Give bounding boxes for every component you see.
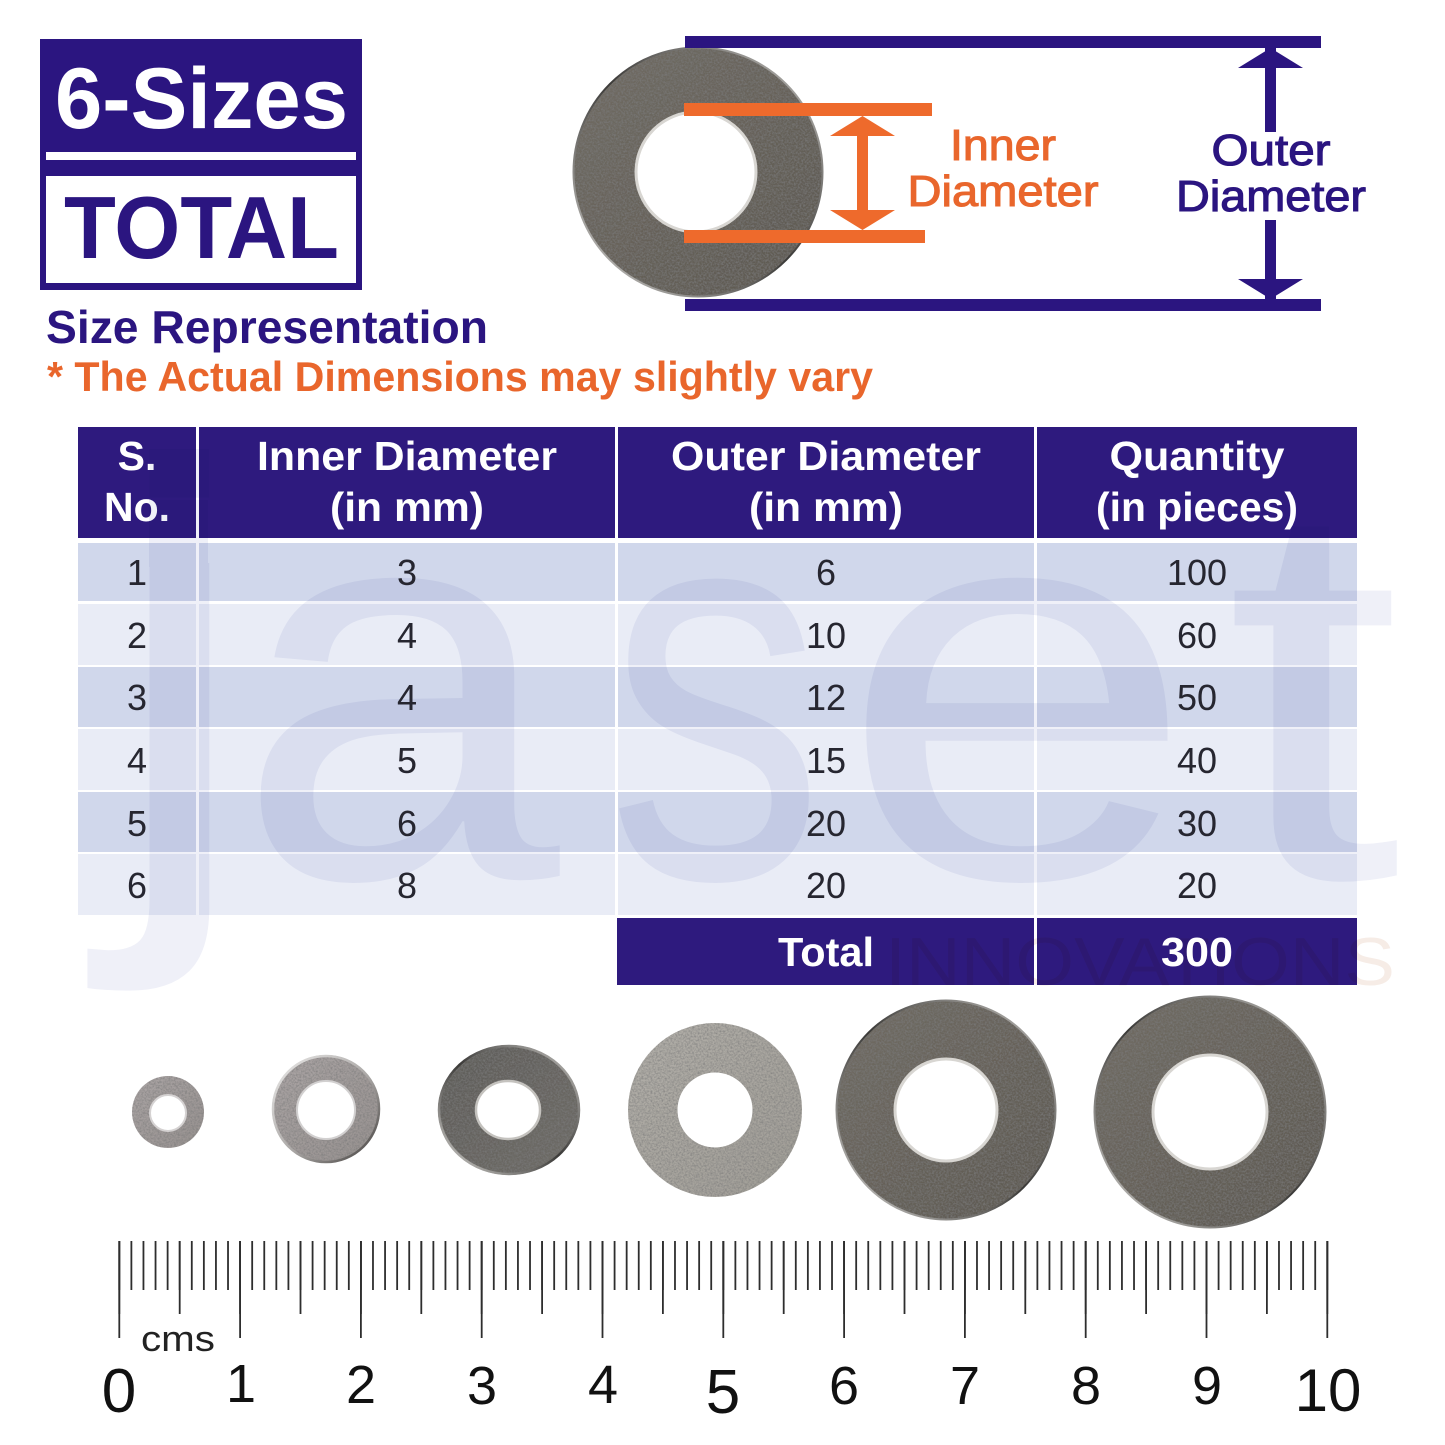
table data rows: 4	[397, 615, 417, 656]
outer diameter bars	[685, 36, 1321, 311]
ruler numbers: 7	[950, 1356, 980, 1416]
table data rows: 10	[806, 615, 846, 656]
table data rows	[127, 552, 1227, 906]
note: actual dimensions disclaimer: * The Actual Dimensions may slightly vary	[47, 353, 874, 400]
watermark: Jaset Innovations: INNOVATIONS	[885, 924, 1395, 1000]
label: Inner Diameter: Inner	[950, 121, 1056, 170]
table data rows: 20	[806, 803, 846, 844]
label: Inner Diameter: Diameter	[908, 167, 1098, 216]
icon: large washer photo	[573, 47, 823, 297]
washer 5	[836, 1000, 1056, 1220]
table header row	[78, 427, 1357, 538]
total row background	[617, 918, 1357, 985]
table: washer sizes	[78, 345, 1404, 1000]
table header row: Inner Diameter	[257, 433, 557, 479]
ruler numbers: 10	[1295, 1357, 1361, 1424]
table data rows: 15	[806, 740, 846, 781]
table header row: (in mm)	[330, 484, 484, 530]
table data rows: 60	[1177, 615, 1217, 656]
total row: 300	[1161, 929, 1233, 975]
ruler: centimetre scale	[102, 1266, 1361, 1427]
table data rows: 5	[397, 740, 417, 781]
ruler ticks	[118, 1266, 1329, 1290]
washers: six sizes	[132, 996, 1326, 1228]
ruler numbers: 3	[467, 1356, 497, 1416]
watermark: Jaset Innovations: t	[1225, 387, 1404, 993]
table data rows: 3	[127, 677, 147, 718]
washer 3	[438, 1045, 580, 1175]
heading: Size Representation: Size Representation	[46, 301, 488, 353]
ruler numbers: 2	[346, 1355, 376, 1415]
total row	[778, 929, 1233, 975]
watermark: Jaset Innovations: e	[839, 374, 1196, 996]
table data rows: 3	[397, 552, 417, 593]
table data rows: 6	[127, 865, 147, 906]
table header row: No.	[104, 484, 170, 530]
ruler unit label: cms	[141, 1318, 215, 1359]
table header row: (in pieces)	[1096, 484, 1298, 530]
badge label: TOTAL: TOTAL	[64, 178, 339, 277]
table data rows: 20	[1177, 865, 1217, 906]
diagram: inner and outer diameter	[573, 36, 1366, 311]
ruler numbers	[102, 1354, 1361, 1427]
label: Outer Diameter: Diameter	[1176, 172, 1366, 221]
inner diameter bars	[684, 103, 932, 243]
watermark: Jaset Innovations: j	[83, 345, 255, 997]
table data rows: 2	[127, 615, 147, 656]
badge heading: 6-Sizes: 6-Sizes	[55, 51, 348, 147]
ruler numbers: 0	[102, 1357, 136, 1426]
label: Outer Diameter: Outer	[1212, 126, 1330, 175]
ruler numbers: 4	[588, 1355, 618, 1415]
watermark: Jaset Innovations: a	[236, 373, 563, 996]
washer 4	[628, 1023, 802, 1197]
table data rows: 100	[1167, 552, 1227, 593]
table data rows: 8	[397, 865, 417, 906]
washer 6	[1094, 996, 1326, 1228]
table data rows: 50	[1177, 677, 1217, 718]
washer 1	[132, 1076, 204, 1148]
table data rows: 6	[397, 803, 417, 844]
table data rows: 30	[1177, 803, 1217, 844]
ruler numbers: 8	[1071, 1356, 1101, 1416]
table data rows: 12	[806, 677, 846, 718]
arrow: outer diameter	[1238, 48, 1303, 299]
table data rows: 1	[127, 552, 147, 593]
table header row: Outer Diameter	[671, 433, 981, 479]
arrow: inner diameter	[830, 116, 895, 230]
watermark: Jaset Innovations: s	[607, 374, 825, 996]
ruler numbers: 5	[706, 1358, 740, 1427]
table data rows: 6	[816, 552, 836, 593]
total row: Total	[778, 929, 874, 975]
label: Outer Diameter	[1176, 126, 1366, 221]
table header row: Quantity	[1110, 433, 1285, 479]
washer 2	[272, 1055, 380, 1163]
table header row: S.	[118, 433, 156, 479]
ruler numbers: 9	[1192, 1356, 1222, 1416]
table data rows: 20	[806, 865, 846, 906]
table header row: (in mm)	[749, 484, 903, 530]
label: Inner Diameter	[908, 121, 1098, 216]
table data rows: 5	[127, 803, 147, 844]
ruler numbers: 1	[226, 1354, 256, 1414]
badge: 6-Sizes Total	[40, 39, 362, 290]
table row backgrounds	[78, 543, 1357, 915]
watermark: Jaset Innovations	[83, 345, 1404, 1000]
table data rows: 40	[1177, 740, 1217, 781]
table data rows: 4	[397, 677, 417, 718]
ruler numbers: 6	[829, 1356, 859, 1416]
table data rows: 4	[127, 740, 147, 781]
